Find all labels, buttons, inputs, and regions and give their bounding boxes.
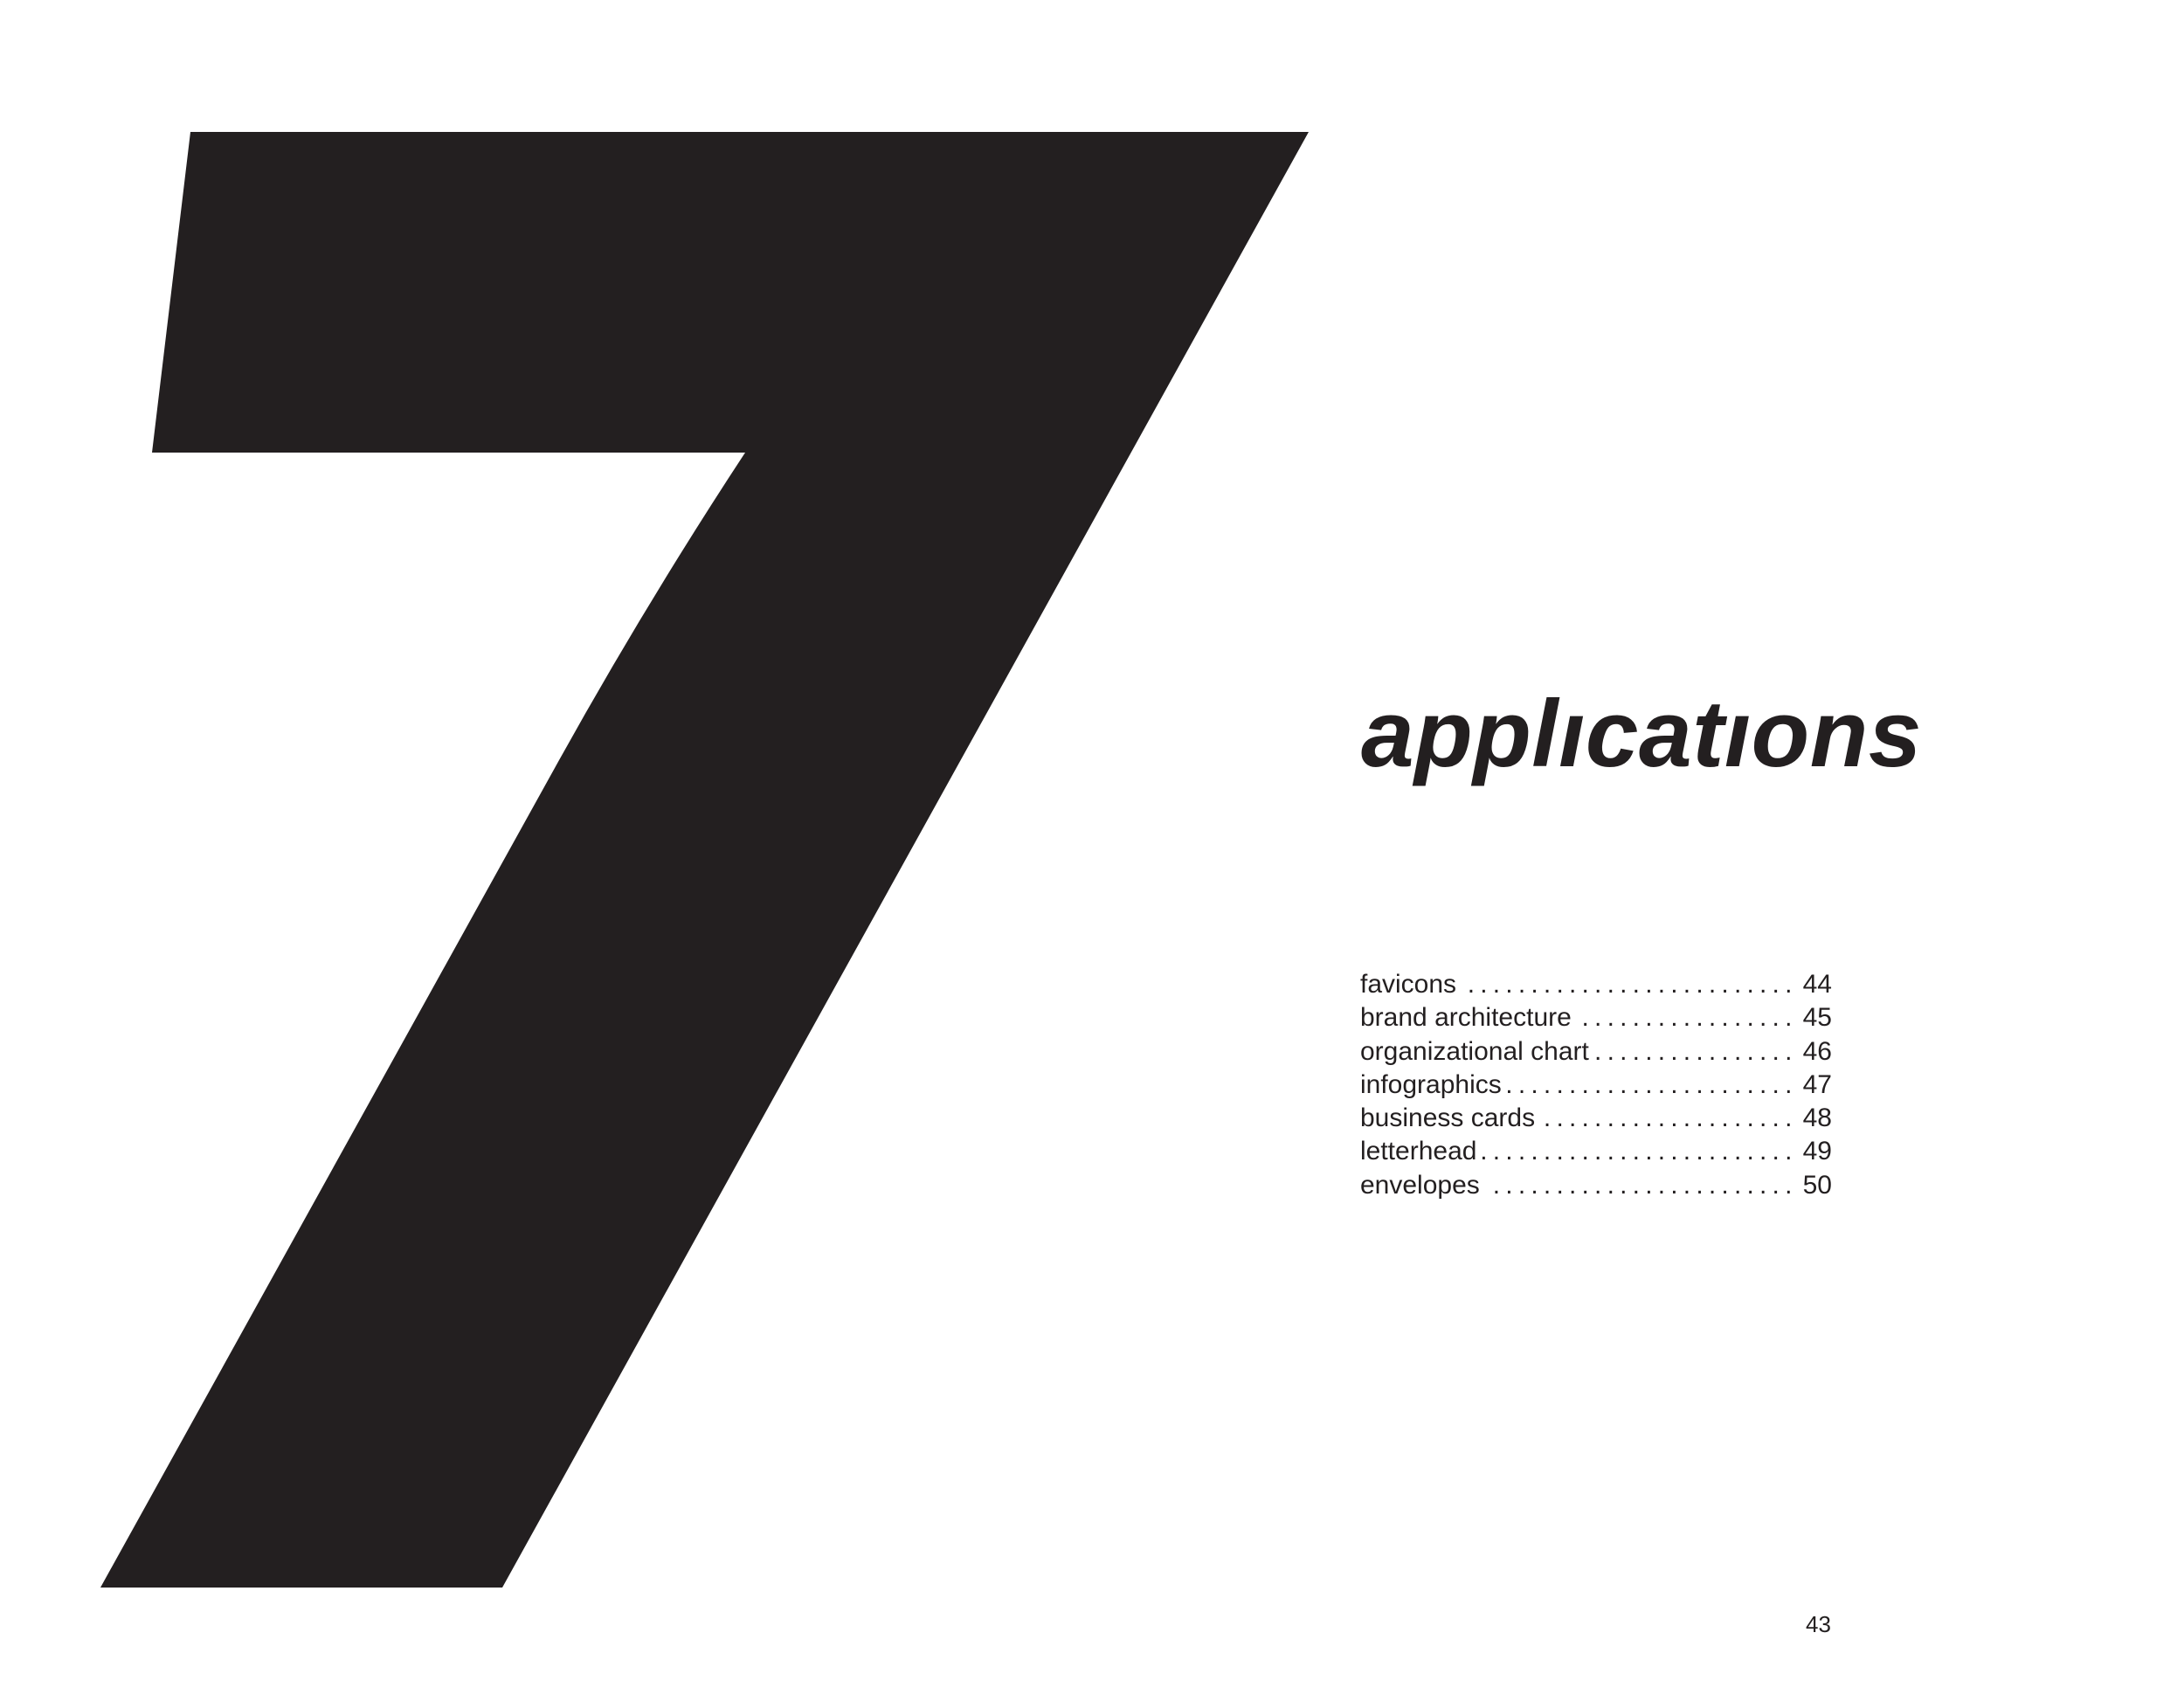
toc entry: brand architecture [1360,1003,1832,1032]
toc entry: favicons: 44 [1803,970,1832,999]
toc entry: organizational chart [1360,1037,1832,1066]
toc entry: business cards: 48 [1803,1103,1832,1132]
toc entry: business cards [1360,1103,1832,1132]
title: applıcatıons [1361,681,1922,787]
toc entry: business cards: business cards [1360,1103,1535,1132]
toc entry: envelopes [1360,1171,1832,1200]
page number: 43 [1806,1611,1831,1637]
toc entry: infographics [1360,1070,1832,1099]
toc entry: letterhead: 49 [1803,1137,1832,1166]
toc entry: organizational chart: 46 [1803,1037,1832,1066]
toc entry: letterhead: letterhead [1360,1137,1476,1166]
table of contents [1360,970,1832,1200]
toc entry: envelopes: envelopes [1360,1171,1480,1200]
toc entry: brand architecture: brand architecture [1360,1003,1572,1032]
toc entry: infographics: infographics [1360,1070,1502,1099]
toc entry: brand architecture: 45 [1803,1003,1832,1032]
toc entry: organizational chart: organizational chart [1360,1037,1589,1066]
toc entry: infographics: 47 [1803,1070,1832,1099]
toc entry: favicons: favicons [1360,970,1456,999]
toc entry: letterhead [1360,1137,1832,1166]
toc entry: envelopes: 50 [1803,1171,1832,1200]
